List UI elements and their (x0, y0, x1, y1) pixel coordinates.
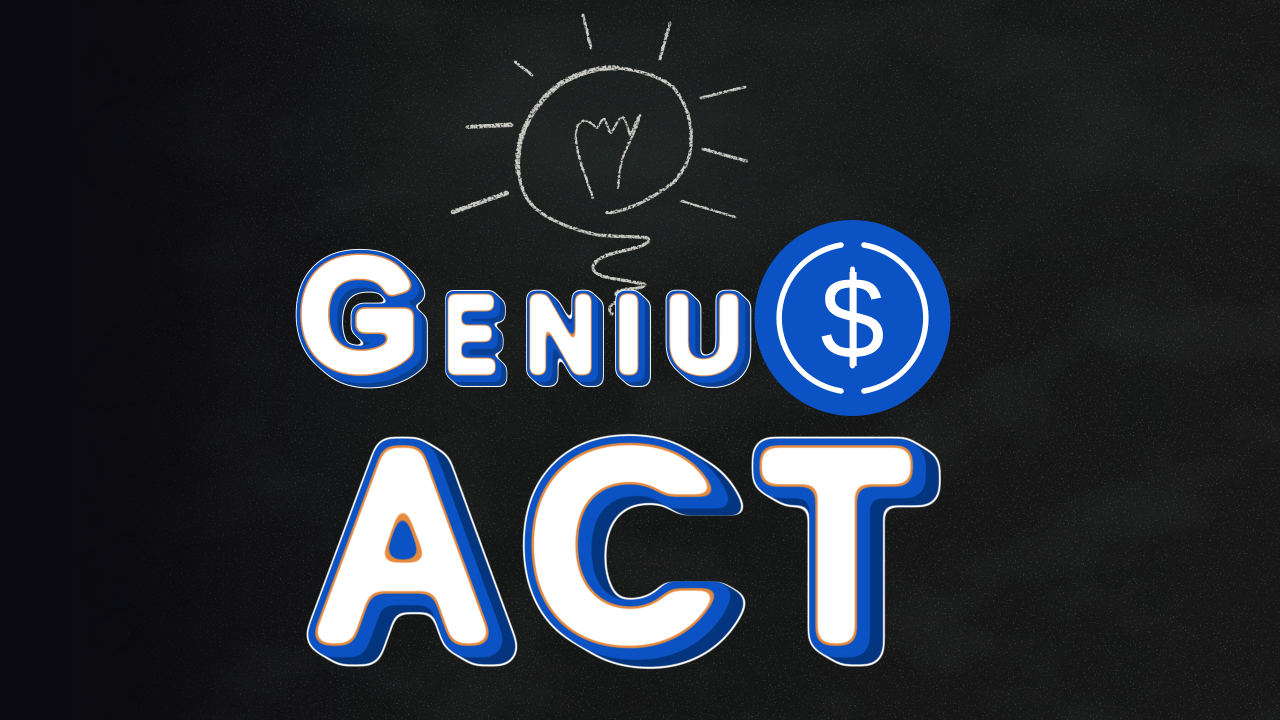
title word: GENIU: IU (614, 276, 742, 394)
title word: GENIU: E (445, 276, 495, 393)
illustration: chalk light bulb (453, 15, 746, 314)
light rays (453, 15, 746, 217)
dollar sign: $ (820, 253, 885, 383)
title word: ACT: T (764, 400, 909, 690)
title word: GENIU: N (526, 276, 595, 394)
title word: GENIU: N (526, 276, 595, 394)
title word: GENIU: N (526, 276, 595, 394)
title word: ACT: A (323, 400, 481, 690)
title word: ACT: C (529, 401, 717, 691)
title word: ACT: T (764, 400, 909, 690)
title word: GENIU: IU (614, 276, 742, 394)
title word: ACT: C (529, 401, 717, 691)
title word: GENIU: E (445, 276, 495, 393)
title word: GENIU: G (300, 230, 418, 400)
title word: ACT: T (764, 400, 909, 690)
title word: ACT: A (323, 400, 481, 690)
thick upper-left of bulb (518, 68, 617, 172)
bulb filament (576, 115, 640, 198)
title word: GENIU: E (445, 276, 495, 393)
title word: GENIU: G (300, 230, 418, 400)
title word: ACT: T (764, 400, 909, 690)
title word: GENIU: N (526, 276, 595, 394)
title word: GENIU: G (300, 230, 418, 400)
title word: GENIU: IU (614, 276, 742, 394)
coin ring arcs (779, 245, 926, 391)
title word: GENIU: IU (614, 276, 742, 394)
title word: GENIU (300, 230, 742, 400)
title word: ACT: T (764, 400, 909, 690)
title word: ACT: C (529, 401, 717, 691)
title word: GENIU: E (445, 276, 495, 393)
title word: GENIU: IU (614, 276, 742, 394)
title word: ACT: A (323, 400, 481, 690)
icon: USD coin logo (754, 220, 950, 416)
bulb outline and squiggle base (518, 68, 691, 314)
title word: ACT: C (529, 401, 717, 691)
title word: GENIU: G (300, 230, 418, 400)
title word: ACT: A (323, 400, 481, 690)
title word: GENIU: E (445, 276, 495, 393)
title word: ACT: A (323, 400, 481, 690)
title word: ACT (306, 434, 941, 670)
title word: GENIU: G (300, 230, 418, 400)
title word: ACT: C (529, 401, 717, 691)
title word: GENIU: N (526, 276, 595, 394)
